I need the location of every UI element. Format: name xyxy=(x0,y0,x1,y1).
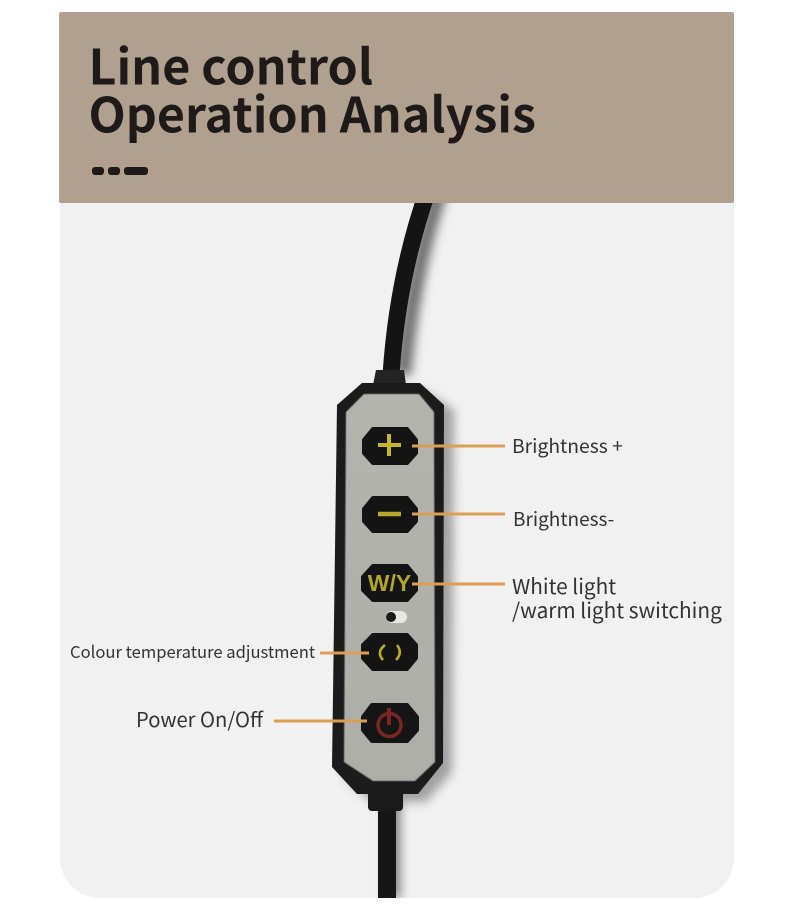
label: white / warm switching: /warm light switching xyxy=(512,594,722,624)
button: white/yellow switch xyxy=(363,566,416,600)
label: brightness plus: Brightness + xyxy=(512,431,623,459)
button: power xyxy=(363,705,417,741)
label: power: Power On/Off xyxy=(136,704,264,733)
shadows behind cable and device xyxy=(344,190,454,898)
button: minus xyxy=(364,498,416,531)
title line two: Operation Analysis xyxy=(88,76,536,146)
cable: upper xyxy=(391,190,428,375)
silver faceplate xyxy=(344,394,435,781)
panel: header xyxy=(59,12,734,203)
panel: light grey background xyxy=(60,190,734,898)
button: colour temperature xyxy=(363,635,416,669)
line control device xyxy=(332,370,444,811)
callout lines xyxy=(274,446,505,721)
cable: lower xyxy=(378,800,396,898)
strain relief bottom xyxy=(368,790,403,811)
header dash marks xyxy=(92,167,148,175)
button: plus xyxy=(364,429,416,463)
label: brightness minus: Brightness- xyxy=(513,505,614,532)
title: Line control xyxy=(88,28,373,98)
indicator light xyxy=(386,611,407,623)
strain relief top xyxy=(373,370,406,385)
device body xyxy=(332,383,444,794)
button: white/yellow switch: W/Y xyxy=(368,570,411,596)
label: colour temperature: Colour temperature adjustment xyxy=(70,639,316,663)
label: white / warm switching xyxy=(512,570,722,624)
label: white / warm switching: White light xyxy=(512,570,616,600)
